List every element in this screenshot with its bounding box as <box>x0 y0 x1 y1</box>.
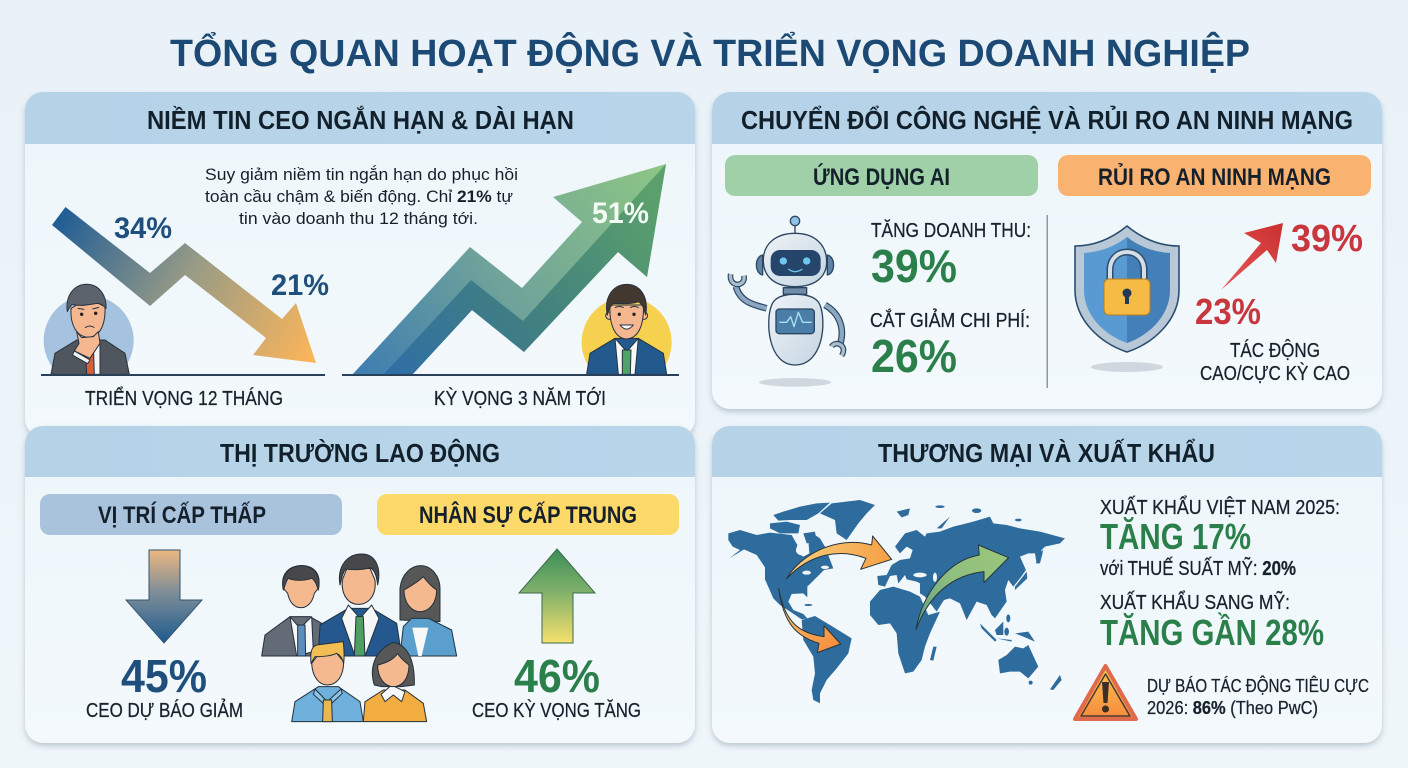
icon: shield with padlock <box>1075 226 1179 372</box>
icon: group of people <box>262 554 457 722</box>
stat: cost reduction: CẮT GIẢM CHI PHÍ: <box>870 308 1030 332</box>
stat: exports to US: XUẤT KHẨU SANG MỸ: <box>1100 590 1290 614</box>
caption: 12 month outlook: TRIỂN VỌNG 12 THÁNG <box>85 387 283 410</box>
stat: 34%: 34% <box>114 212 172 245</box>
subheader: AI adoption <box>725 155 1038 196</box>
icon: robot <box>730 216 843 387</box>
callout: negative impact forecast: DỰ BÁO TÁC ĐỘNG TIÊU CỰC <box>1147 675 1369 696</box>
arrow: up <box>519 549 595 643</box>
arrow: orange trade route south <box>779 588 841 653</box>
world map <box>728 500 1065 703</box>
arrow: rising confidence <box>352 164 666 375</box>
panel: labour market <box>25 426 695 743</box>
subheader: cyber risk: RỦI RO AN NINH MẠNG <box>1098 162 1331 191</box>
icon: warning triangle <box>1075 666 1136 719</box>
subheader: entry level: VỊ TRÍ CẤP THẤP <box>98 501 266 529</box>
stat: Vietnam exports 2025: với THUẾ SUẤT MỸ: 20% <box>1100 556 1296 580</box>
icon: confident CEO <box>582 284 672 374</box>
subheader: mid level <box>377 494 679 535</box>
stat: exports to US: TĂNG GẦN 28% <box>1100 612 1324 653</box>
stat: 45 percent: 45% <box>121 650 207 702</box>
arrow: orange trade route north <box>787 536 892 579</box>
callout: negative impact forecast: 2026: 86% (Theo PwC) <box>1147 698 1318 718</box>
caption: high impact <box>1200 339 1350 385</box>
panel header: trade and exports <box>712 426 1382 477</box>
subheader: AI adoption: ỨNG DỤNG AI <box>813 163 950 191</box>
panel header: trade and exports: THƯƠNG MẠI VÀ XUẤT KHẨU <box>878 438 1215 468</box>
baseline: short term <box>41 374 325 376</box>
subheader: cyber risk <box>1058 155 1371 196</box>
stat: cost reduction <box>870 308 1030 382</box>
stat: 45 percent <box>86 650 243 722</box>
stat: Vietnam exports 2025: XUẤT KHẨU VIỆT NAM 2025: <box>1100 496 1340 519</box>
panel header: technology and cyber risk <box>712 92 1382 144</box>
text block: confidence summary <box>205 165 518 228</box>
stat: 46 percent: CEO KỲ VỌNG TĂNG <box>472 699 641 722</box>
baseline: long term <box>342 374 679 376</box>
arrow: cyber risk rising <box>1221 223 1283 290</box>
arrow: down <box>126 550 202 643</box>
stat: cost reduction: 26% <box>871 330 957 382</box>
caption: high impact: CAO/CỰC KỲ CAO <box>1200 362 1350 385</box>
panel header: labour market <box>25 426 695 477</box>
stat: 46 percent: 46% <box>514 650 600 702</box>
text block: confidence summary: tin vào doanh thu 12 tháng tới. <box>239 209 478 228</box>
subheader: entry level <box>40 494 342 535</box>
stat: 51%: 51% <box>592 197 649 230</box>
panel header: labour market: THỊ TRƯỜNG LAO ĐỘNG <box>220 438 500 468</box>
panel header: CEO confidence <box>25 92 695 144</box>
caption: 3 year expectation: KỲ VỌNG 3 NĂM TỚI <box>434 387 606 410</box>
stat: revenue growth: TĂNG DOANH THU: <box>871 219 1031 242</box>
stat: exports to US <box>1100 590 1324 653</box>
subheader: mid level: NHÂN SỰ CẤP TRUNG <box>419 501 637 529</box>
text block: confidence summary: toàn cầu chậm & biến động. Chỉ 21% tự <box>205 187 513 206</box>
stat: 23%: 23% <box>1195 291 1261 332</box>
panel header: technology and cyber risk: CHUYỂN ĐỔI CÔNG NGHỆ VÀ RỦI RO AN NINH MẠNG <box>741 104 1353 135</box>
caption: high impact: TÁC ĐỘNG <box>1230 339 1320 362</box>
panel: trade and exports <box>712 426 1382 743</box>
stat: 21%: 21% <box>271 269 329 302</box>
stat: Vietnam exports 2025: TĂNG 17% <box>1100 516 1251 557</box>
stat: 39%: 39% <box>1291 218 1363 260</box>
stat: revenue growth <box>871 219 1031 292</box>
arrow: green trade route <box>916 545 1009 629</box>
stat: revenue growth: 39% <box>871 240 957 292</box>
icon: worried CEO <box>44 284 134 374</box>
arrow: falling confidence <box>52 207 316 363</box>
stat: 46 percent <box>472 650 641 722</box>
stat: 45 percent: CEO DỰ BÁO GIẢM <box>86 699 243 722</box>
text block: confidence summary: Suy giảm niềm tin ngắn hạn do phục hồi <box>205 165 518 184</box>
panel: CEO confidence <box>25 92 695 437</box>
panel: technology and cyber risk <box>712 92 1382 409</box>
stat: Vietnam exports 2025 <box>1100 496 1340 580</box>
title: TỔNG QUAN HOẠT ĐỘNG VÀ TRIỂN VỌNG DOANH NGHIỆP <box>170 30 1250 75</box>
callout: negative impact forecast <box>1147 675 1369 718</box>
panel header: CEO confidence: NIỀM TIN CEO NGẮN HẠN & DÀI HẠN <box>147 105 574 135</box>
